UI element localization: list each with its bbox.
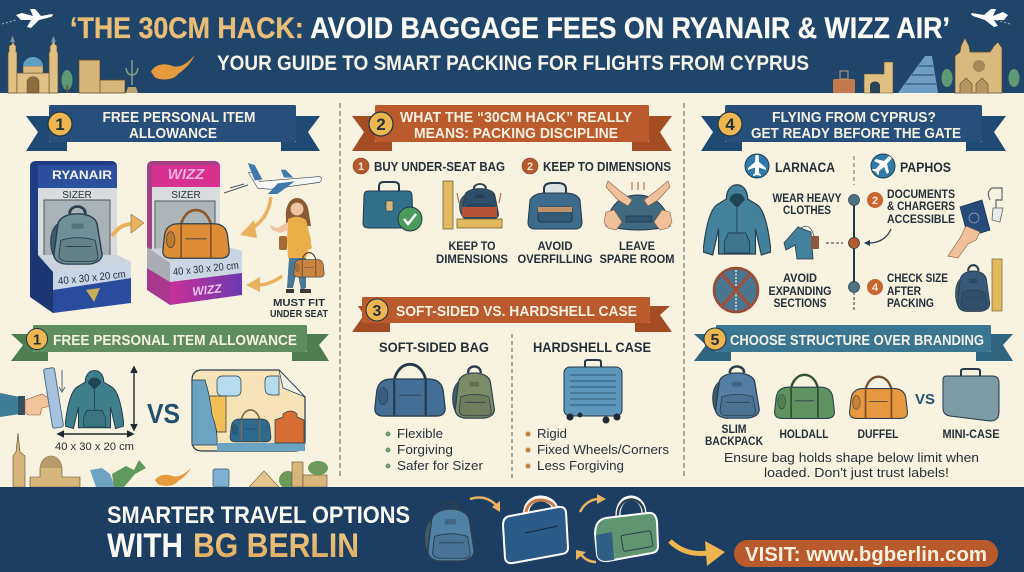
caption: leave spare room: LEAVE <box>619 241 655 253</box>
Wizz sizer: SIZER <box>171 190 201 201</box>
soft-sided column <box>375 339 494 473</box>
panel: section 4 flying from Cyprus <box>701 105 1006 312</box>
bag: slim backpack <box>705 366 764 448</box>
Larnaca label <box>745 154 835 178</box>
Ryanair sizer: SIZER <box>62 190 92 201</box>
hardshell column: Less Forgiving <box>537 459 624 473</box>
step: check size <box>867 273 948 310</box>
caption: leave spare room <box>600 241 674 266</box>
dashed separator <box>853 156 855 185</box>
bag: duffel <box>850 377 907 441</box>
hoodie with dimensions <box>55 367 137 453</box>
footer band <box>0 487 1024 572</box>
bag: slim backpack: SLIM <box>722 424 746 436</box>
VS small: VS <box>915 391 935 408</box>
icon: passport and charger <box>948 188 1003 258</box>
note text <box>724 450 979 480</box>
bag: holdall <box>775 375 834 441</box>
Wizz sizer: 40 x 30 x 20 cm <box>172 260 240 278</box>
caption: avoid overfilling: AVOID <box>538 241 572 253</box>
Wizz sizer: WIZZ <box>192 281 223 299</box>
panel: green allowance comparison <box>0 325 329 489</box>
Paphos label: PAPHOS <box>900 160 951 175</box>
icon: backpack and ruler <box>955 259 1002 311</box>
Wizz sizer <box>147 161 242 305</box>
step: check size: CHECK SIZE <box>887 273 948 285</box>
dashed divider right <box>683 103 685 478</box>
caption: avoid expanding sections: AVOID <box>783 273 817 285</box>
footer headline: BG BERLIN <box>193 527 359 565</box>
ribbon heading 3: 3 <box>373 303 382 320</box>
ribbon heading 1: ALLOWANCE <box>129 125 217 142</box>
skyline left <box>8 36 195 93</box>
Ryanair sizer <box>30 161 131 313</box>
cabin illustration <box>192 370 305 451</box>
note text: loaded. Don't just trust labels! <box>764 465 949 480</box>
ribbon heading 2: MEANS: PACKING DISCIPLINE <box>414 125 618 142</box>
step: documents: 2 <box>872 195 878 207</box>
caption: avoid expanding sections: SECTIONS <box>774 298 827 310</box>
icon: small jacket <box>784 226 819 259</box>
ribbon heading 3 <box>352 297 672 332</box>
ribbon heading 1: FREE PERSONAL ITEM <box>102 109 256 126</box>
ribbon heading 3: SOFT-SIDED VS. HARDSHELL CASE <box>396 303 637 320</box>
icon: bag with rulers <box>443 181 502 229</box>
ribbon heading green: FREE PERSONAL ITEM ALLOWANCE <box>53 333 297 349</box>
footer headline <box>107 502 410 565</box>
footer green bag <box>595 498 658 561</box>
ribbon heading 5: 5 <box>711 332 720 349</box>
caption: avoid overfilling <box>518 241 593 266</box>
Paphos label <box>871 154 951 178</box>
footer navy bag <box>503 498 568 563</box>
step: keep to dimensions: 2 <box>527 161 533 173</box>
caption: keep to dimensions: KEEP TO <box>448 241 496 253</box>
note text: Ensure bag holds shape below limit when <box>724 450 979 465</box>
footer headline: SMARTER TRAVEL OPTIONS <box>107 502 410 529</box>
icon: plane left <box>2 9 53 28</box>
timeline <box>848 194 860 312</box>
title: ‘THE 30CM HACK: AVOID BAGGAGE FEES ON RYANAIR & WIZZ AIR’ <box>70 12 950 45</box>
ribbon heading green <box>11 325 329 361</box>
step: check size: PACKING <box>887 298 934 310</box>
VS label: VS <box>147 398 180 429</box>
caption: wear heavy clothes <box>772 193 842 217</box>
ribbon heading 2: 2 <box>376 115 386 134</box>
hardshell column: HARDSHELL CASE <box>533 339 651 355</box>
step: check size: 4 <box>872 282 879 294</box>
ribbon heading green: 1 <box>33 332 41 348</box>
hardshell column <box>526 339 669 473</box>
Ryanair sizer: 40 x 30 x 20 cm <box>57 268 127 288</box>
hardshell column: Rigid <box>537 427 567 441</box>
visit button: VISIT: www.bgberlin.com <box>745 544 987 566</box>
ribbon heading 1: 1 <box>55 115 65 134</box>
arrow between sizers <box>112 214 144 236</box>
bag: mini-case: MINI-CASE <box>942 429 1000 441</box>
caption: avoid expanding sections: EXPANDING <box>768 286 832 298</box>
ribbon heading 5: CHOOSE STRUCTURE OVER BRANDING <box>730 333 984 349</box>
footer big arrow <box>670 541 725 566</box>
ribbon heading 4: 4 <box>725 115 735 134</box>
column divider <box>511 334 513 478</box>
label: must fit under seat: MUST FIT <box>273 297 326 309</box>
skyline right <box>833 38 1020 93</box>
subtitle: YOUR GUIDE TO SMART PACKING FOR FLIGHTS FROM CYPRUS <box>217 51 809 75</box>
caption: wear heavy clothes: WEAR HEAVY <box>772 193 842 205</box>
header band <box>0 0 1024 93</box>
caption: keep to dimensions <box>436 241 508 266</box>
step: keep to dimensions: KEEP TO DIMENSIONS <box>543 159 671 174</box>
step: documents <box>867 189 955 226</box>
ribbon heading 1 <box>26 105 320 151</box>
step: buy under-seat bag: 1 <box>358 161 364 173</box>
panel: section 2 packing discipline <box>352 105 674 266</box>
caption: leave spare room: SPARE ROOM <box>600 254 674 266</box>
ribbon heading 4: FLYING FROM CYPRUS? <box>772 109 936 126</box>
soft-sided column: SOFT-SIDED BAG <box>379 339 489 355</box>
bag: holdall: HOLDALL <box>780 429 828 441</box>
person with bag <box>270 198 324 293</box>
footer headline: WITH <box>107 527 183 565</box>
Ryanair sizer: RYANAIR <box>52 168 112 182</box>
footer arrow top left <box>470 498 500 512</box>
dashed connector <box>826 242 843 244</box>
label: must fit under seat <box>270 297 328 320</box>
bottom skyline <box>13 433 328 489</box>
icon: plane right <box>971 9 1010 27</box>
hand measuring with board <box>0 367 65 428</box>
hardshell column: Fixed Wheels/Corners <box>537 443 669 457</box>
panel: section 3 soft vs hard <box>352 297 672 478</box>
Wizz sizer: WIZZ <box>168 166 205 183</box>
footer backpack <box>425 502 474 561</box>
step: documents: DOCUMENTS <box>887 189 955 201</box>
ribbon heading 4: GET READY BEFORE THE GATE <box>751 125 961 142</box>
ribbon heading 4 <box>701 105 1006 151</box>
step: documents: & CHARGERS <box>887 201 955 213</box>
caption: avoid overfilling: OVERFILLING <box>518 254 593 266</box>
panel: section 5 structure over branding <box>694 325 1013 480</box>
icon: briefcase with check <box>363 182 422 231</box>
icon: hoodie <box>703 185 771 255</box>
ribbon heading 5 <box>694 325 1013 361</box>
ribbon heading 2 <box>352 105 672 151</box>
footer arrow top right <box>580 494 606 512</box>
icon: no expanding sections <box>714 268 758 312</box>
caption: wear heavy clothes: CLOTHES <box>783 205 831 217</box>
dashed divider left <box>339 103 341 478</box>
panel: section 1 free personal item <box>26 105 328 320</box>
label: must fit under seat: UNDER SEAT <box>270 308 328 320</box>
step: documents: ACCESSIBLE <box>887 214 955 226</box>
soft-sided column: Forgiving <box>397 443 453 457</box>
bag: slim backpack: BACKPACK <box>705 436 764 448</box>
soft-sided column: Flexible <box>397 427 443 441</box>
icon: hands pressing bag <box>604 181 672 230</box>
caption: keep to dimensions: DIMENSIONS <box>436 254 508 266</box>
hoodie with dimensions: 40 x 30 x 20 cm <box>55 441 134 453</box>
Larnaca label: LARNACA <box>775 160 835 175</box>
soft-sided column: Safer for Sizer <box>397 459 483 473</box>
step: check size: AFTER <box>887 286 922 298</box>
icon: full bag <box>528 183 582 229</box>
bag: duffel: DUFFEL <box>858 429 898 441</box>
arrows to sizer <box>240 197 282 292</box>
caption: avoid expanding sections <box>768 273 832 310</box>
step: buy under-seat bag: BUY UNDER-SEAT BAG <box>374 159 505 174</box>
bag: mini-case <box>942 369 1000 441</box>
footer arrow bottom <box>576 550 596 562</box>
airplane <box>224 163 322 196</box>
ribbon heading 2: WHAT THE “30CM HACK” REALLY <box>400 109 632 126</box>
arrow to timeline <box>864 229 891 246</box>
